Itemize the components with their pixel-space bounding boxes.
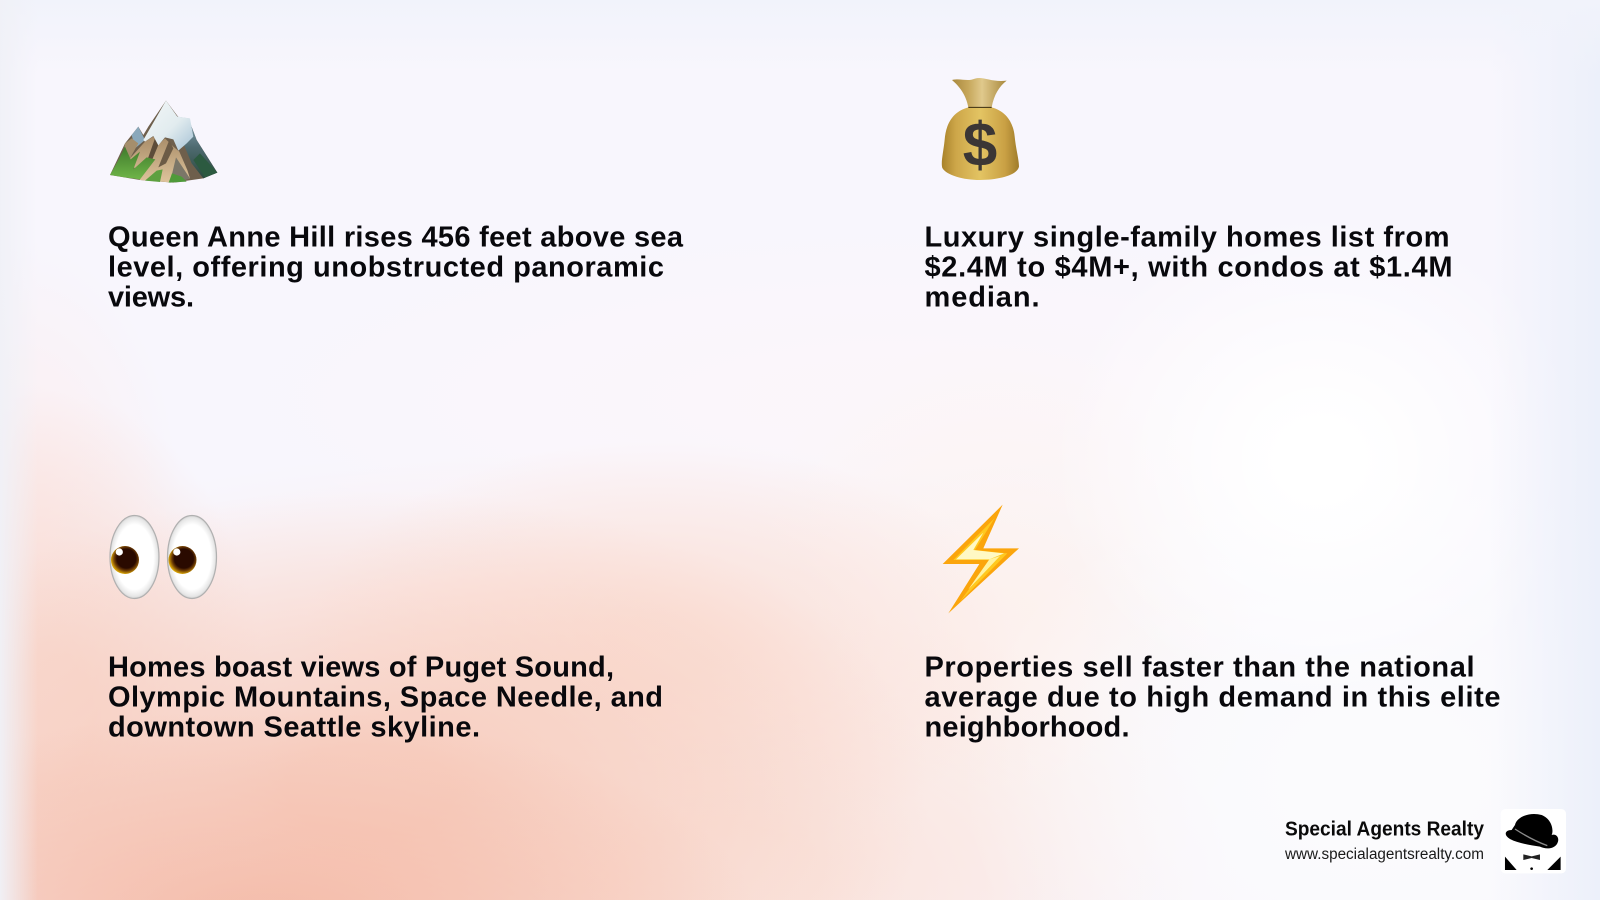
icon: eyes <box>110 516 216 598</box>
icon: money bag <box>942 78 1019 180</box>
text: speed fact: Properties sell faster than the national <box>924 652 1474 684</box>
icon: lightning bolt <box>943 505 1019 613</box>
text: views fact: Olympic Mountains, Space Needle, and <box>108 682 663 714</box>
text: mountain fact: views. <box>108 282 194 314</box>
brand name and URL: Special Agents Realty <box>1285 818 1485 840</box>
text: mountain fact <box>108 222 684 314</box>
logo: bowler hat agent <box>1501 809 1566 873</box>
text: views fact: Homes boast views of Puget Sound, <box>108 652 614 684</box>
brand name and URL: www.specialagentsrealty.com <box>1284 846 1484 863</box>
icon: mountain <box>110 101 217 183</box>
text: price fact <box>924 222 1452 314</box>
dollar sign: $ <box>963 111 997 180</box>
text: mountain fact: level, offering unobstructed panoramic <box>108 252 664 284</box>
text: price fact: Luxury single-family homes list from <box>924 222 1450 254</box>
text: speed fact <box>924 652 1500 744</box>
text: views fact <box>108 652 663 744</box>
text: speed fact: average due to high demand in this elite <box>924 682 1500 714</box>
text: price fact: $2.4M to $4M+, with condos at $1.4M <box>924 252 1452 284</box>
text: speed fact: neighborhood. <box>924 712 1130 744</box>
brand name and URL <box>1284 818 1485 863</box>
text: views fact: downtown Seattle skyline. <box>108 712 480 744</box>
text: mountain fact: Queen Anne Hill rises 456 feet above sea <box>108 222 684 254</box>
text: price fact: median. <box>924 282 1040 314</box>
